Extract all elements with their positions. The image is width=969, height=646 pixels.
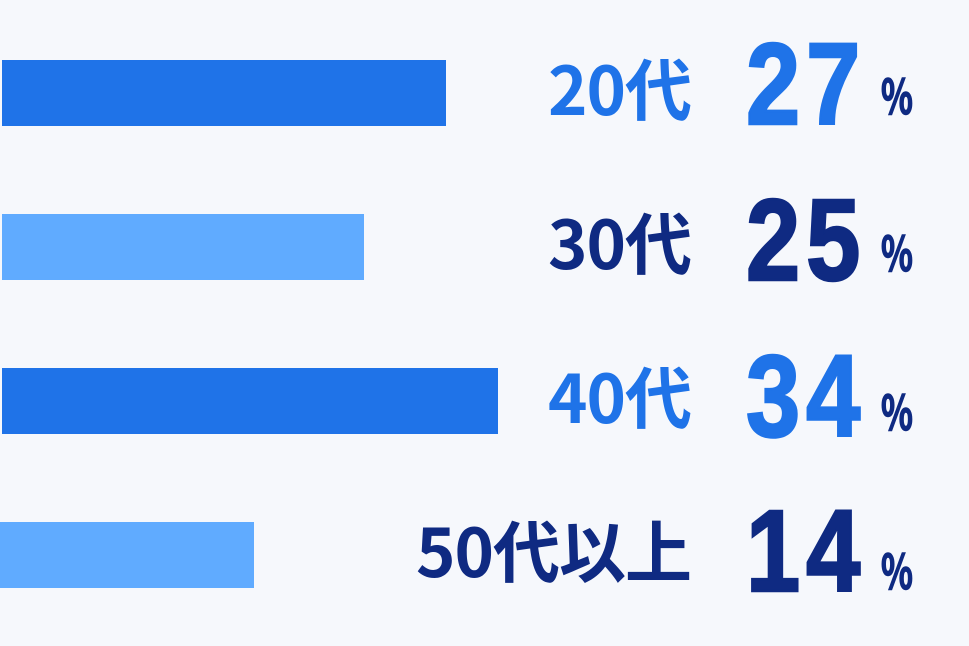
percent sign: %: [881, 215, 913, 285]
label: 30s: 30代: [548, 192, 691, 289]
value: 27: 27: [746, 19, 866, 149]
value: 34: 34: [746, 331, 866, 461]
percent sign: %: [881, 58, 913, 128]
bar: 20s: [2, 60, 446, 126]
percent sign: %: [881, 533, 913, 603]
label: 40s: 40代: [548, 346, 691, 443]
row: 30s: [2, 175, 913, 305]
value: 14: 14: [746, 486, 866, 616]
row: 20s: [2, 19, 913, 149]
row: 50s and over: [0, 486, 913, 616]
bar: 50s and over: [0, 522, 254, 588]
percent sign: %: [881, 374, 913, 444]
value: 25: 25: [746, 175, 866, 305]
row: 40s: [2, 331, 913, 461]
label: 20s: 20代: [548, 38, 691, 135]
label: 50s and over: 50代以上: [416, 500, 691, 597]
bar: 30s: [2, 214, 364, 280]
bar: 40s: [2, 368, 498, 434]
